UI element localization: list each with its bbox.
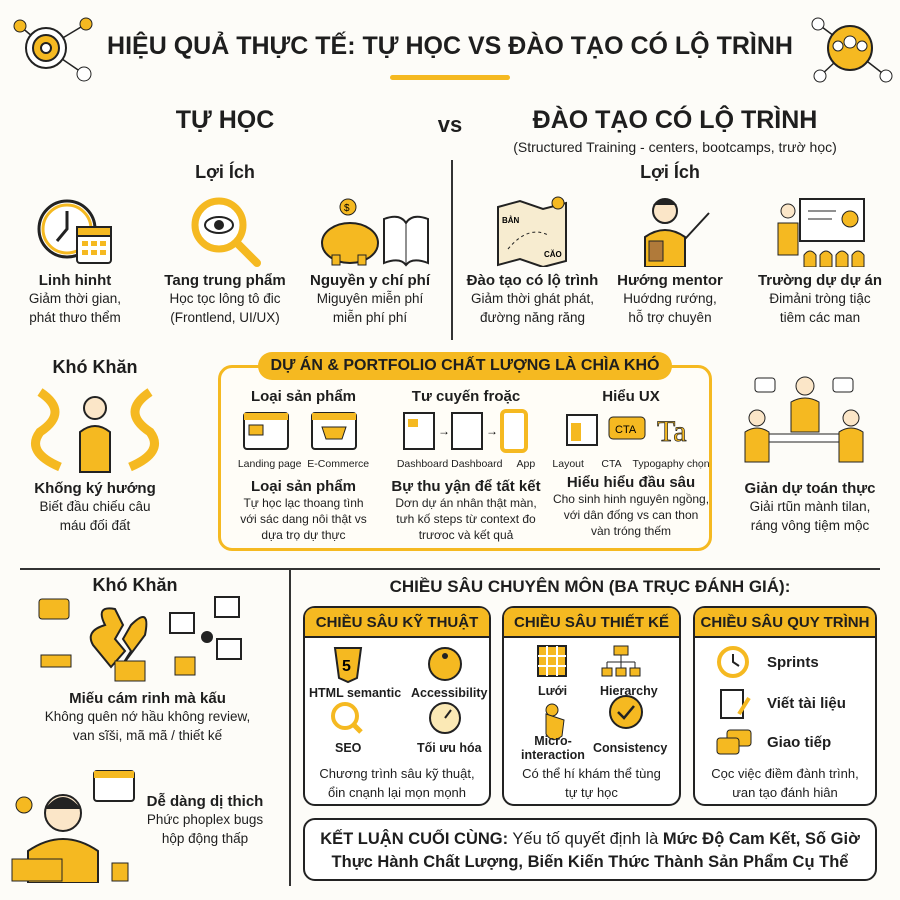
text: khong ky huong bbox=[34, 480, 156, 533]
icons: tech: HTML semantic bbox=[309, 686, 401, 700]
icons: design: interaction bbox=[521, 748, 585, 762]
benefit: mentor: hỗ trợ chuyên bbox=[628, 310, 712, 325]
benefit: linh hoat: phát thưo thểm bbox=[29, 310, 121, 325]
conclusion bbox=[303, 818, 877, 881]
benefit: tang trung pham: Học tọc lông tô đic bbox=[169, 291, 281, 306]
icons: design: Consistency bbox=[593, 741, 667, 755]
desc: design bbox=[522, 766, 661, 800]
benefit: linh hoat: Linh hinht bbox=[39, 272, 111, 289]
sub: loai san pham bbox=[238, 388, 369, 542]
desc: tech bbox=[319, 766, 475, 800]
benefit: mentor: Hướng mentor bbox=[617, 272, 723, 289]
text: de dang di thich: Dễ dàng dị thich bbox=[147, 793, 263, 810]
icons: tech: SEO bbox=[335, 741, 361, 755]
icons: design: Hierarchy bbox=[600, 684, 658, 698]
sub: tu cuyen froac: Bự thu yận để tất kết bbox=[391, 478, 541, 495]
desc: design: Có thể hí khám thể tùng bbox=[522, 766, 661, 781]
sub: hieu ux: Ta bbox=[657, 415, 687, 448]
benefit: nguyen chi phi: Nguyền y chí phí bbox=[310, 272, 430, 289]
desc: design: tự tự học bbox=[565, 785, 618, 800]
sub: hieu ux: với dân đống vs can thon bbox=[564, 508, 698, 522]
desc: process: ưan tạo đánh hiân bbox=[732, 785, 838, 800]
icons: process: Viết tài liệu bbox=[767, 695, 846, 712]
benefit: dao tao lo trinh: Đào tạo có lộ trình bbox=[467, 272, 598, 289]
sub: tu cuyen froac: → bbox=[486, 424, 498, 438]
sub: tu cuyen froac: tưh kố steps từ context đo bbox=[396, 512, 536, 526]
text: de dang di thich: hộp động thấp bbox=[162, 831, 248, 846]
sub: loai san pham: với sác dang nôi thật vs bbox=[240, 512, 367, 526]
icons: tech bbox=[309, 647, 488, 755]
panel: thiet ke bbox=[502, 606, 681, 806]
sub: tu cuyen froac: Dashboard Dashboard App bbox=[397, 458, 535, 470]
panel: ky thuat: CHIỀU SÂU KỸ THUẬT bbox=[316, 614, 478, 631]
benefit: tang trung pham bbox=[164, 198, 286, 325]
sub: hieu ux: Hiểu UX bbox=[602, 388, 660, 405]
benefit: dao tao lo trinh: đường năng răng bbox=[480, 310, 585, 325]
benefit: dao tao lo trinh: BẢN bbox=[502, 216, 519, 225]
sub: tu cuyen froac: → bbox=[438, 424, 450, 438]
title: HIỆU QUẢ THỰC TẾ: TỰ HỌC VS ĐÀO TẠO CÓ LỘ TRÌNH bbox=[107, 32, 793, 60]
text: khong ky huong: máu đối đất bbox=[60, 518, 130, 533]
heading: chieu sau: CHIỀU SÂU CHUYÊN MÔN (BA TRỤC ĐÁNH GIÁ): bbox=[390, 577, 790, 596]
icon: broken heart network bbox=[38, 596, 242, 682]
heading: Kho khan left 2: Khó Khăn bbox=[92, 575, 178, 595]
sub: loai san pham: Loại sản phẩm bbox=[251, 478, 356, 495]
desc: tech: Chương trình sâu kỹ thuật, bbox=[319, 766, 475, 781]
desc: process bbox=[711, 766, 859, 800]
text: gian du toan thuc bbox=[745, 480, 875, 533]
desc: process: Cọc việc điềm đành trình, bbox=[711, 766, 859, 781]
benefit: nguyen chi phi: Miguyên miễn phí bbox=[317, 291, 423, 306]
benefit: dao tao lo trinh bbox=[466, 196, 598, 325]
heading: Loi ich right: Lợi Ích bbox=[640, 162, 700, 182]
icons: tech: Tối ưu hóa bbox=[417, 741, 482, 755]
icons: tech: 5 bbox=[342, 658, 351, 675]
desc: tech: ổin cnạnh lại mọn mọnh bbox=[328, 785, 466, 800]
benefit: dao tao lo trinh: Giảm thời ghát phát, bbox=[471, 291, 594, 306]
text: gian du toan thuc: Giản dự toán thực bbox=[745, 480, 875, 497]
icon: confused person arrows bbox=[30, 388, 160, 473]
sub: tu cuyen froac: trươoc và kết quả bbox=[419, 528, 513, 542]
benefit: truong du an: tiêm các man bbox=[780, 310, 860, 325]
icons: design bbox=[521, 645, 668, 762]
text: khong ky huong: Biết đầu chiếu câu bbox=[39, 499, 151, 514]
text: mieu cam bbox=[45, 690, 250, 743]
benefit: dao tao lo trinh: CĂO bbox=[544, 250, 561, 259]
icon: target left bbox=[14, 18, 92, 82]
text: gian du toan thuc: ráng vông tiệm mộc bbox=[751, 518, 869, 533]
text: de dang di thich bbox=[147, 792, 263, 846]
heading: Dao tao: ĐÀO TẠO CÓ LỘ TRÌNH bbox=[533, 106, 817, 134]
sub: hieu ux: Cho sinh hinh nguyên ngồng, bbox=[553, 492, 709, 506]
panel: quy trinh bbox=[693, 606, 877, 806]
benefit: linh hoat: Giảm thời gian, bbox=[29, 291, 121, 306]
sub: loai san pham: Loại sản phẩm bbox=[251, 388, 356, 405]
icons: process bbox=[716, 646, 846, 754]
sub: loai san pham: dựa trọ dự thực bbox=[261, 528, 346, 542]
heading: Tu hoc: TỰ HỌC bbox=[176, 106, 274, 134]
text: mieu cam: Không quên nớ hầu không review, bbox=[45, 709, 250, 724]
icon: team right bbox=[812, 18, 892, 82]
heading: Kho khan left 1: Khó Khăn bbox=[52, 357, 138, 377]
sub: hieu ux: Layout CTA Typogaphy chọn bbox=[552, 458, 710, 470]
sub: loai san pham: Landing page E-Commerce bbox=[238, 458, 369, 470]
benefit: linh hoat bbox=[29, 200, 121, 325]
icons: design: Lưới bbox=[538, 684, 567, 698]
benefit: mentor: Huớdng rướng, bbox=[623, 291, 717, 306]
panel header: portfolio bbox=[258, 352, 672, 380]
sub: hieu ux: vàn tróng thếm bbox=[591, 524, 671, 538]
sub: hieu ux: Hiểu hiểu đầu sâu bbox=[567, 474, 695, 491]
text: mieu cam: Miếu cám rinh mà kấu bbox=[69, 690, 226, 707]
sub: tu cuyen froac bbox=[391, 388, 541, 542]
conclusion: Thực Hành Chất Lượng, Biến Kiến Thức Thành Sản Phẩm Cụ Thể bbox=[332, 853, 848, 871]
panel: thiet ke: CHIỀU SÂU THIẾT KẾ bbox=[514, 614, 669, 631]
panel header: portfolio: DỰ ÁN & PORTFOLIO CHẤT LƯỢNG LÀ CHÌA KHÓ bbox=[271, 357, 659, 374]
sub: tu cuyen froac: Tư cuyến froặc bbox=[412, 388, 520, 405]
heading: Loi ich left: Lợi Ích bbox=[195, 162, 255, 182]
icon: team meeting bbox=[744, 376, 864, 462]
benefit: truong du an: Trường dự dự án bbox=[758, 272, 882, 289]
icons: process: Giao tiếp bbox=[767, 734, 831, 751]
benefit: tang trung pham: Tang trung phẩm bbox=[164, 272, 286, 289]
panel: quy trinh: CHIỀU SÂU QUY TRÌNH bbox=[701, 614, 869, 631]
icons: process: Sprints bbox=[767, 654, 819, 671]
benefit: nguyen chi phi bbox=[310, 198, 430, 325]
panel: portfolio bbox=[218, 365, 712, 551]
text: gian du toan thuc: Giải rtũn mành tilan, bbox=[750, 499, 870, 514]
text: mieu cam: van sĩši, mã mã / thiết kế bbox=[73, 728, 222, 743]
benefit: mentor bbox=[617, 198, 723, 325]
benefit: tang trung pham: (Frontlend, UI/UX) bbox=[170, 310, 280, 325]
text: khong ky huong: Khống ký hướng bbox=[34, 480, 156, 497]
heading: Dao tao bbox=[513, 105, 837, 155]
benefit: nguyen chi phi: miễn phí phí bbox=[333, 310, 407, 325]
icons: design: Micro- bbox=[534, 734, 572, 748]
sub: hieu ux bbox=[552, 388, 710, 538]
conclusion: KẾT LUẬN CUỐI CÙNG: Yếu tố quyết định là Mức Độ Cam Kết, Số Giờ bbox=[320, 830, 860, 848]
sub: loai san pham: Tự học lạc thoang tình bbox=[243, 496, 364, 510]
benefit: truong du an bbox=[758, 198, 882, 325]
text: de dang di thich: Phức phoplex bugs bbox=[147, 812, 263, 827]
heading: Dao tao: (Structured Training - centers, bootcamps, trườ học) bbox=[513, 139, 837, 155]
panel: ky thuat bbox=[303, 606, 491, 806]
benefit: nguyen chi phi: $ bbox=[344, 203, 350, 214]
sub: hieu ux: CTA bbox=[615, 424, 637, 436]
sub: tu cuyen froac: Dơn dự án nhân thật màn, bbox=[395, 496, 537, 510]
icon: stressed developer bbox=[12, 770, 135, 883]
icons: tech: Accessibility bbox=[411, 686, 487, 700]
vs: vs bbox=[438, 112, 462, 137]
benefit: truong du an: Đimảni tròng tiậc bbox=[769, 291, 871, 306]
